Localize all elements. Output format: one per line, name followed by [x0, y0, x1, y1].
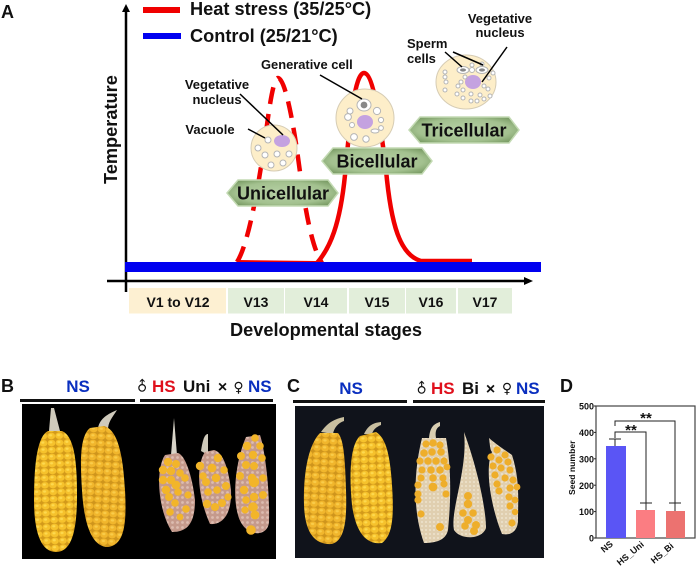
- control line: [125, 262, 541, 272]
- significance brackets: [615, 421, 675, 503]
- stage bar: V1 to V12: [146, 294, 210, 310]
- y axis title: Seed number: [567, 440, 577, 495]
- full ears: [49, 408, 60, 431]
- stage bar: V14: [304, 294, 329, 310]
- panel D: seed number bar chart: 500: [579, 402, 594, 412]
- labels: sperm cells: [407, 36, 447, 66]
- label: vegetative nucleus, tricellular: nucleus: [475, 25, 525, 40]
- panel B header: ♀: [233, 380, 244, 396]
- labels: sperm cells: Sperm: [407, 36, 447, 51]
- panel A: temperature chart: [101, 0, 541, 340]
- stage bar: V17: [473, 294, 498, 310]
- panel label B: B: [1, 376, 14, 396]
- panel D: seed number bar chart: [567, 402, 695, 568]
- tag: tricellular: [409, 117, 519, 143]
- panel D: seed number bar chart: 200: [579, 481, 594, 491]
- label: generative cell: Generative cell: [261, 57, 353, 72]
- panel B header: [20, 377, 273, 402]
- panel D: seed number bar chart: 0: [589, 534, 594, 544]
- bars with error bars: [609, 439, 681, 511]
- panel D: seed number bar chart: **: [625, 422, 637, 439]
- labels: vegetative nucleus, vacuole: [185, 77, 249, 137]
- panel B header: Uni: [183, 377, 210, 396]
- labels: vegetative nucleus, vacuole: nucleus: [192, 92, 242, 107]
- x axis labels: HS_Uni: [615, 539, 646, 568]
- panel B header: NS: [248, 377, 272, 396]
- panel B photo: maize ears: [22, 404, 276, 559]
- x axis labels: [599, 539, 676, 568]
- labels: vegetative nucleus, vacuole: Vacuole: [185, 122, 235, 137]
- panel D: seed number bar chart: 100: [579, 507, 594, 517]
- panel label A: A: [1, 2, 14, 22]
- x axis title: Developmental stages: [230, 320, 422, 340]
- panel C header: HS: [431, 379, 455, 398]
- x axis: [107, 277, 533, 285]
- panel D: seed number bar chart: **: [640, 410, 652, 427]
- kernels on small ears: [160, 435, 266, 534]
- panel B header: NS: [66, 377, 90, 396]
- panel C header: [293, 379, 545, 403]
- panel C header: NS: [516, 379, 540, 398]
- label: vegetative nucleus, tricellular: [468, 11, 532, 40]
- labels: sperm cells: cells: [407, 51, 436, 66]
- kernels on small ears: [415, 440, 520, 534]
- panel D: seed number bar chart: 300: [579, 454, 594, 464]
- panel D: seed number bar chart: 400: [579, 428, 594, 438]
- y axis: [122, 4, 130, 292]
- panel C header: Bi: [462, 379, 479, 398]
- heat stress curve, solid: [317, 73, 472, 263]
- full ears: [321, 417, 344, 434]
- unicellular pollen cell: [240, 94, 297, 171]
- tricellular pollen cell: [436, 47, 507, 109]
- labels: vegetative nucleus, vacuole: Vegetative: [185, 77, 249, 92]
- panel C header: ♂: [412, 379, 432, 399]
- tag: unicellular: [227, 180, 338, 206]
- panel B header: ×: [218, 379, 227, 396]
- legend: control: Control (25/21°C): [190, 26, 338, 46]
- stage bar: [129, 288, 512, 314]
- bicellular pollen cell: [320, 75, 394, 147]
- panel label D: D: [560, 376, 573, 396]
- panel C photo: maize ears: [295, 406, 544, 558]
- heat stress flat baseline: [237, 261, 316, 262]
- y axis ticks and labels: [594, 406, 596, 538]
- x axis labels: NS: [599, 539, 615, 555]
- stage bar: V16: [419, 294, 444, 310]
- tag: unicellular: Unicellular: [237, 184, 329, 204]
- tag: tricellular: Tricellular: [421, 120, 507, 140]
- small ears: [429, 422, 440, 438]
- tag: bicellular: [322, 148, 432, 174]
- x axis labels: HS_Bi: [649, 541, 676, 566]
- panel C header: NS: [339, 379, 363, 398]
- panel C header: ♀: [502, 381, 512, 397]
- small ears: [171, 418, 177, 455]
- panel B header: ♂: [133, 377, 153, 397]
- y axis title: Temperature: [101, 75, 121, 184]
- panel label C: C: [287, 376, 300, 396]
- stage bar: V13: [244, 294, 269, 310]
- plot frame: [596, 406, 695, 538]
- heat stress curve, dashed: [237, 78, 322, 263]
- tag: bicellular: Bicellular: [336, 152, 418, 172]
- stage bar: V15: [365, 294, 390, 310]
- panel C header: ×: [486, 381, 495, 398]
- label: vegetative nucleus, tricellular: Vegetative: [468, 11, 532, 26]
- panel B header: HS: [152, 377, 176, 396]
